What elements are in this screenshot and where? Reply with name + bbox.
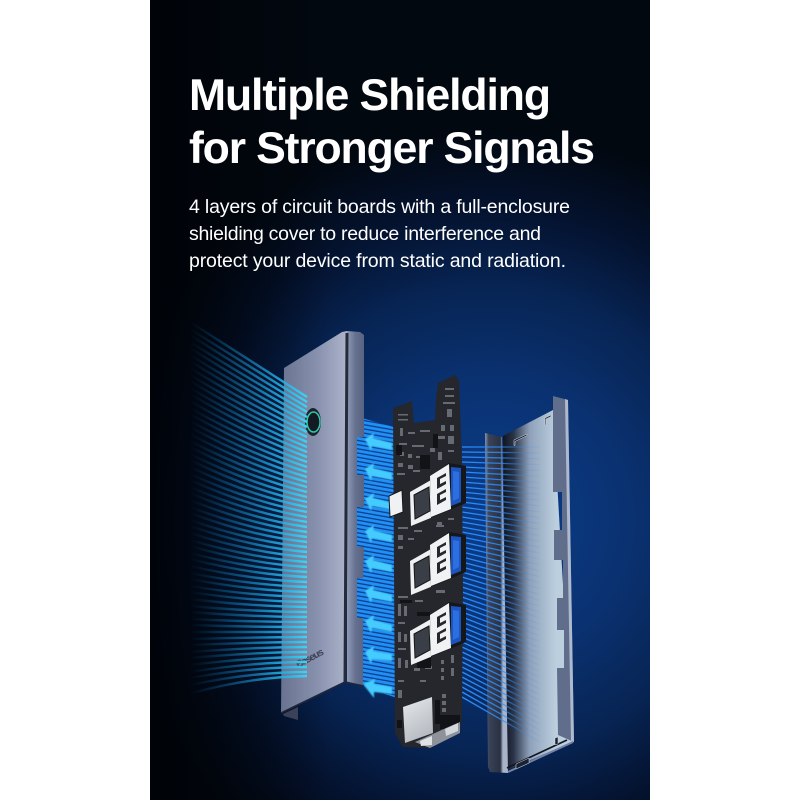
fold line [345,333,347,682]
left flange [485,433,508,773]
description text: shielding cover to reduce interference and [189,223,541,245]
description text: 4 layers of circuit boards with a full-enclosure [189,196,570,218]
clip slots [514,415,558,769]
arrow 2 [365,463,392,481]
power button [305,408,321,436]
signal arrows [363,433,392,698]
arrow 1 [365,433,392,451]
interior [503,410,572,770]
USB port module 1 [410,463,466,526]
metal bottom connector [415,722,460,748]
board body [393,375,463,748]
board traces and components [397,388,455,712]
arrow 4 [365,525,392,543]
arrow 6 [365,585,392,603]
right signal lines [462,447,540,742]
front face [281,331,347,713]
left shielding cover [281,331,364,720]
dark blue panel [150,0,650,800]
USB port module 2 [410,532,466,595]
darker component blocks [396,434,460,729]
circuit board [389,375,466,748]
arrow 8 [365,646,392,664]
side face with notches [347,331,364,685]
description text: protect your device from static and radiation. [189,250,566,272]
right edge highlight [565,399,574,742]
side connector [389,490,403,517]
central blue signal band [355,416,397,698]
arrow 7 [365,615,392,633]
bottom edge and tab [281,682,363,713]
title: for Stronger Signals [189,124,595,173]
arrow 9 [363,679,392,698]
title: Multiple Shielding [189,71,551,120]
brand name: Baseus [294,647,326,671]
USB port module 3 [410,602,466,665]
left signal lines [190,322,307,693]
arrow 5 [365,555,392,573]
arrow 3 [365,493,392,511]
bottom edge [508,742,573,772]
silver shield square [403,697,433,743]
right shielding cover [485,396,574,773]
description text [189,196,570,272]
right flange with notches [553,396,574,742]
title [189,71,595,173]
